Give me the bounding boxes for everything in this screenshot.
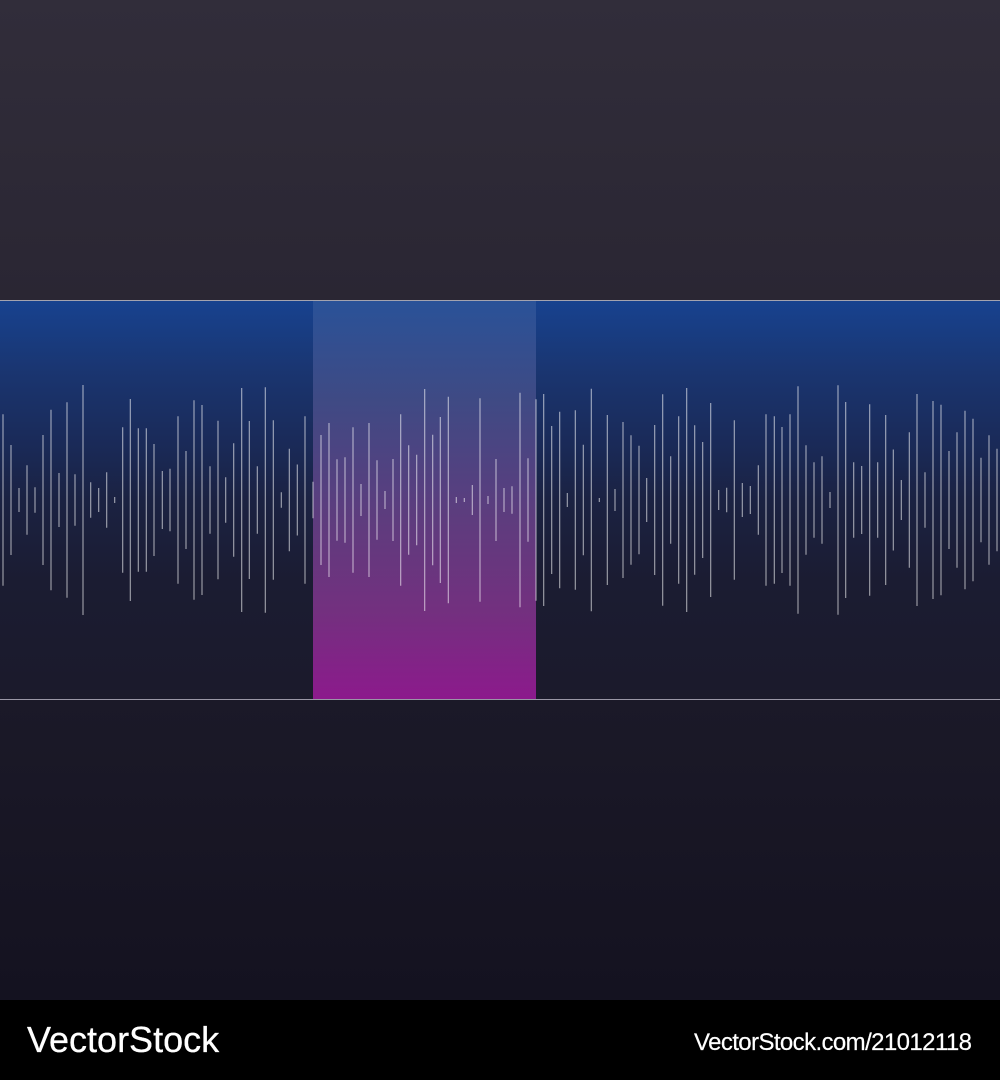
image url text: VectorStock.com/21012118 xyxy=(694,1029,971,1056)
footer bar xyxy=(0,1000,1000,1080)
panel: highlighted section xyxy=(313,301,536,699)
logo text: VectorStock xyxy=(27,1019,219,1060)
panel: waveform band xyxy=(0,300,1000,700)
